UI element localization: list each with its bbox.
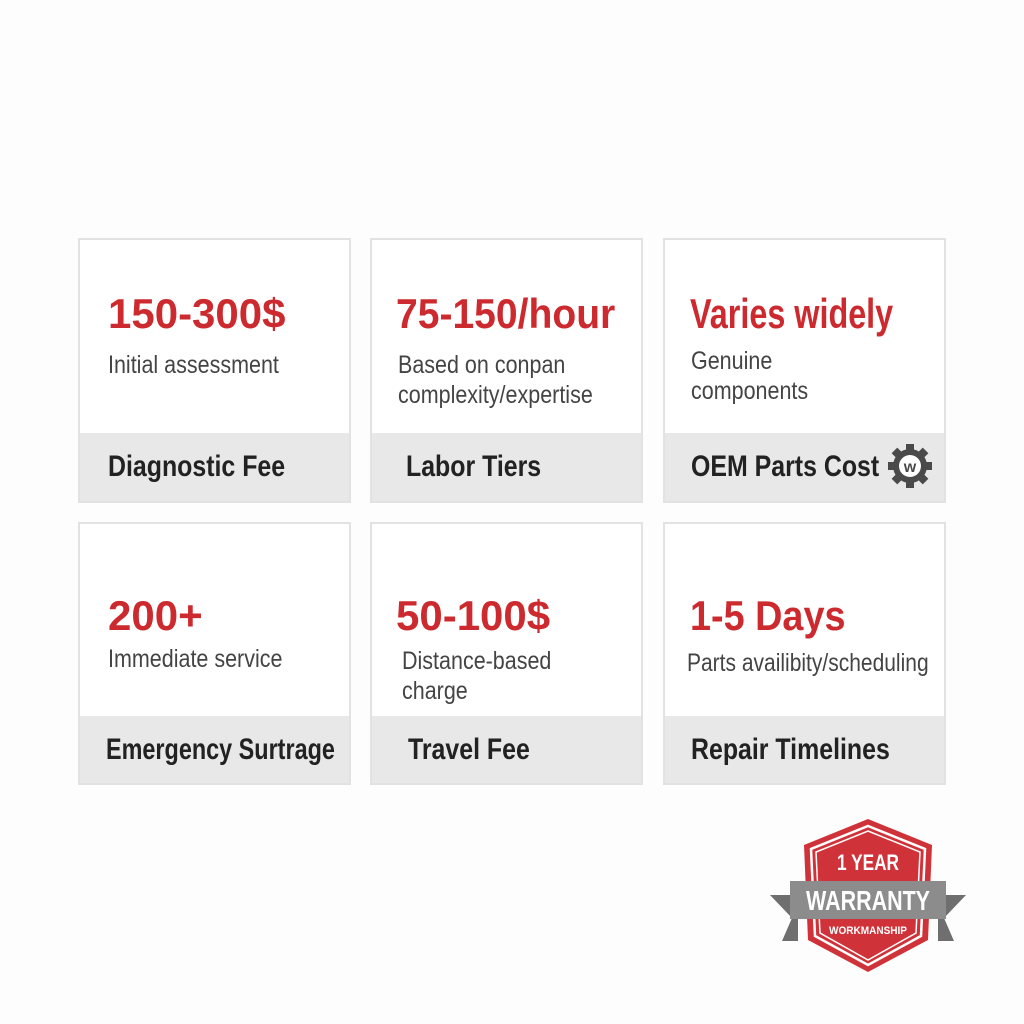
footer label: [80, 716, 349, 783]
value: Varies widely: [690, 290, 893, 337]
value: 150-300$: [108, 290, 286, 337]
description: [402, 647, 551, 705]
description: Based on conpan: [398, 351, 565, 379]
card: travel fee: [370, 522, 643, 785]
footer label: [80, 433, 349, 501]
description: components: [691, 377, 808, 405]
description: Distance-based: [402, 647, 551, 675]
description: Immediate service: [108, 645, 282, 673]
badge: 1 year warranty: WORKMANSHIP: [829, 925, 907, 937]
value: 50-100$: [396, 592, 550, 639]
footer label: Labor Tiers: [406, 450, 541, 483]
footer label: [665, 716, 944, 783]
icon: gear: [888, 444, 932, 488]
badge: 1 year warranty: 1 YEAR: [837, 850, 899, 875]
footer label: Repair Timelines: [691, 732, 890, 766]
card: diagnostic fee: [78, 238, 351, 503]
footer label: Diagnostic Fee: [108, 450, 285, 483]
badge: 1 year warranty: [770, 819, 966, 972]
description: charge: [402, 677, 468, 705]
footer label: Emergency Surtrage: [106, 732, 335, 766]
footer label: [372, 433, 641, 501]
description: complexity/expertise: [398, 381, 593, 409]
badge: 1 year warranty: WARRANTY: [806, 885, 930, 916]
footer label: [372, 716, 641, 783]
footer label: OEM Parts Cost: [691, 450, 879, 483]
description: Parts availibity/scheduling: [687, 649, 929, 677]
card: OEM parts cost: [663, 238, 946, 503]
description: [691, 347, 808, 405]
value: 75-150/hour: [396, 290, 615, 337]
value: 200+: [108, 592, 203, 639]
icon: gear: w: [903, 459, 917, 476]
card: repair timelines: [663, 522, 946, 785]
footer label: Travel Fee: [408, 732, 530, 766]
card: labor tiers: [370, 238, 643, 503]
description: [398, 351, 593, 409]
description: Genuine: [691, 347, 772, 375]
card: emergency surcharge: [78, 522, 351, 785]
description: Initial assessment: [108, 351, 279, 379]
footer label: [665, 433, 944, 501]
value: 1-5 Days: [690, 592, 846, 639]
